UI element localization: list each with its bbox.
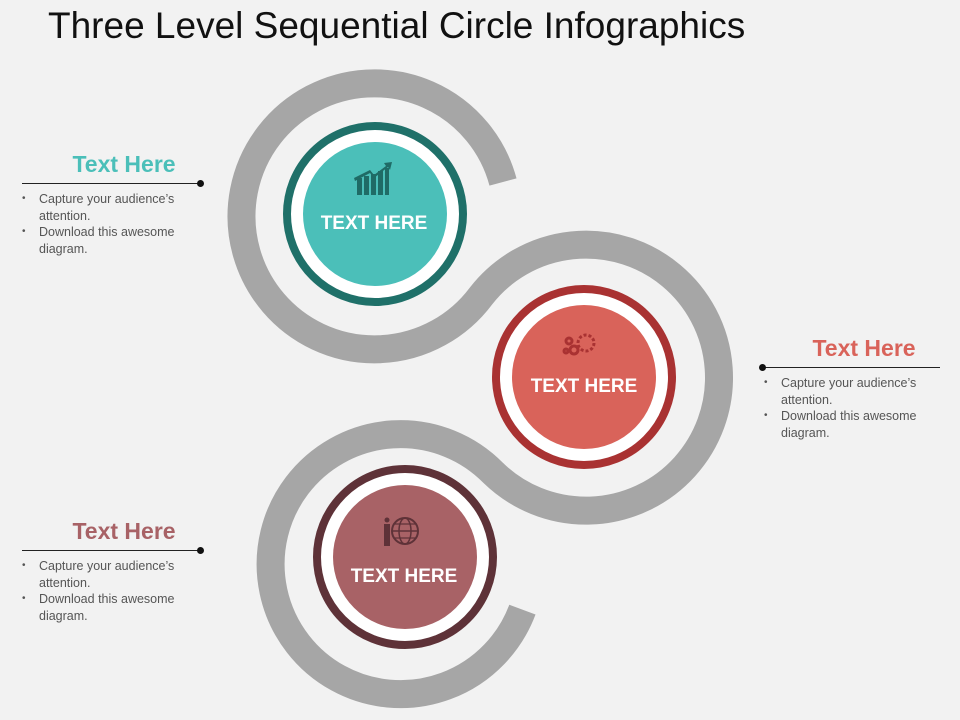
icon: globe person: [384, 518, 418, 546]
heading: Text Here: [72, 518, 176, 544]
bullets: [22, 192, 174, 256]
bullets: Download this awesome diagram.: [39, 225, 174, 256]
title: Three Level Sequential Circle Infographics: [48, 5, 745, 46]
bullets: [764, 376, 916, 440]
heading: Text Here: [72, 151, 176, 177]
circle 3: [317, 469, 493, 645]
panel: right: [759, 335, 940, 440]
icon: chart: [354, 162, 392, 195]
heading: Text Here: [812, 335, 916, 361]
bullets: Capture your audience’s attention.: [39, 192, 174, 222]
bullets: [22, 559, 174, 622]
circle 2: TEXT HERE: [531, 376, 637, 397]
circle 3: TEXT HERE: [351, 566, 457, 587]
icon: gears: [564, 335, 594, 354]
circle 1: TEXT HERE: [321, 213, 427, 234]
bullets: Capture your audience’s attention.: [39, 559, 174, 590]
circle 1: [287, 126, 463, 302]
circle 2: [496, 289, 672, 465]
gray connector path: [242, 83, 719, 694]
panel: left bottom: [22, 518, 204, 622]
panel: left top: [22, 151, 204, 256]
bullets: Download this awesome diagram.: [781, 409, 916, 440]
bullets: Download this awesome diagram.: [39, 592, 174, 622]
bullets: Capture your audience’s attention.: [781, 376, 916, 406]
